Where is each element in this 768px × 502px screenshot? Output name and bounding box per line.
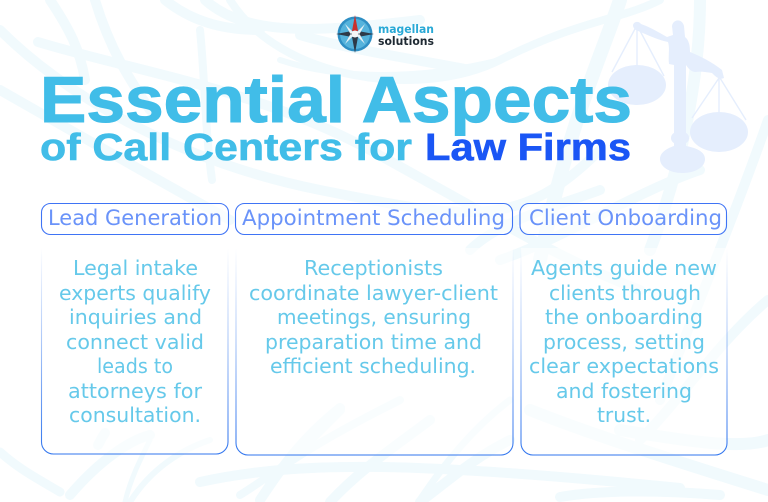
logo wordmark <box>378 22 434 48</box>
card: client onboarding: trust. <box>597 403 651 427</box>
card: appointment scheduling: coordinate lawyer-client <box>249 281 498 305</box>
card: lead generation: attorneys for <box>68 379 203 403</box>
card: client onboarding: process, setting <box>543 330 705 354</box>
card: lead generation: Legal intake <box>73 256 198 280</box>
subtitle: of Call Centers for <box>40 127 412 169</box>
card: client onboarding: clear expectations <box>529 354 719 378</box>
subtitle highlight: Law Firms <box>425 127 631 169</box>
card: lead generation: experts qualify <box>59 281 211 305</box>
panel: client onboarding <box>520 204 727 455</box>
heading: client onboarding: Client Onboarding <box>529 206 722 230</box>
logo <box>336 15 434 53</box>
card: lead generation: leads to <box>97 354 173 378</box>
card: client onboarding: clients through <box>549 281 701 305</box>
icon: scales of justice <box>608 20 748 173</box>
card: lead generation <box>42 248 228 454</box>
card: client onboarding: Agents guide new <box>531 256 717 280</box>
card: client onboarding: and fostering <box>556 379 692 403</box>
right pan <box>690 112 748 152</box>
logo wordmark: magellan <box>378 22 434 36</box>
card: appointment scheduling: Receptionists <box>304 256 443 280</box>
icon: compass <box>336 15 374 53</box>
panel: appointment scheduling <box>236 204 513 455</box>
logo wordmark: solutions <box>378 34 434 48</box>
card: appointment scheduling: preparation time and <box>265 330 482 354</box>
panel: lead generation <box>42 204 228 454</box>
card: client onboarding <box>521 248 727 455</box>
left pan <box>608 65 666 105</box>
card: client onboarding: the onboarding <box>545 305 703 329</box>
card: appointment scheduling: efficient scheduling. <box>270 354 476 378</box>
heading: lead generation: Lead Generation <box>48 206 222 230</box>
card: appointment scheduling <box>236 248 513 455</box>
heading: appointment scheduling: Appointment Scheduling <box>242 206 505 230</box>
card: lead generation: inquiries and <box>69 305 202 329</box>
title: Essential Aspects <box>40 63 632 136</box>
card: appointment scheduling: meetings, ensuring <box>277 305 471 329</box>
scale figure <box>633 20 724 173</box>
card: lead generation: connect valid <box>66 330 204 354</box>
title <box>40 63 632 169</box>
card: lead generation: consultation. <box>69 403 201 427</box>
